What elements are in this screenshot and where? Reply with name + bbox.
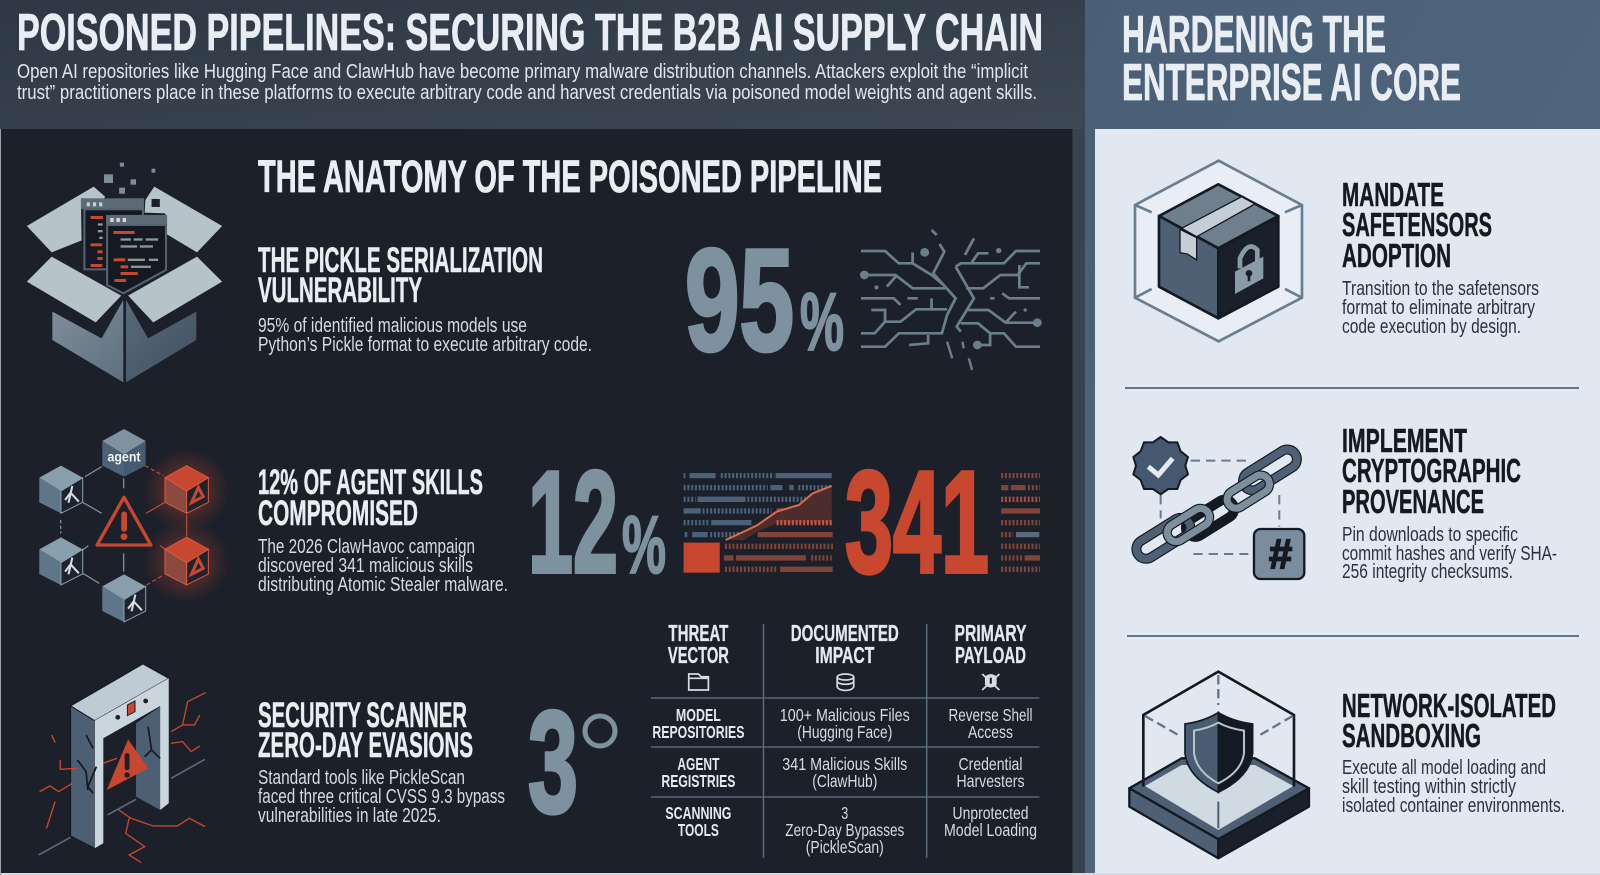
table row: agent registries: AGENT — [677, 754, 720, 774]
table row: agent registries: 341 Malicious Skills — [782, 754, 908, 774]
table: threat vectors — [651, 620, 1040, 858]
description: vulnerabilities in late 2025. — [258, 805, 441, 827]
table row: model repositories: REPOSITORIES — [652, 722, 744, 742]
description: skill testing within strictly — [1342, 776, 1516, 798]
header intro text — [17, 61, 1037, 104]
heading — [258, 241, 543, 310]
icon: shield in sandbox — [1129, 672, 1309, 858]
heading: SANDBOXING — [1342, 717, 1481, 754]
table header row: VECTOR — [668, 642, 729, 668]
table row: scanning tools: 3 — [841, 803, 848, 823]
chart: data bars with rising red line — [684, 476, 833, 573]
table row: scanning tools: Zero-Day Bypasses — [785, 820, 904, 840]
right header title: HARDENING THE — [1122, 6, 1386, 64]
description: Standard tools like PickleScan — [258, 767, 465, 789]
description: 95% of identified malicious models use — [258, 315, 527, 337]
stat: 95%: % — [800, 277, 844, 368]
heading: THE PICKLE SERIALIZATION — [258, 241, 543, 280]
stat: 12%: 12 — [528, 441, 618, 603]
table row: scanning tools: (PickleScan) — [806, 837, 884, 857]
block: agent skills compromised — [258, 463, 508, 596]
description: Transition to the safetensors — [1342, 278, 1539, 300]
description: discovered 341 malicious skills — [258, 555, 473, 577]
icon: breached security scanner — [39, 664, 206, 863]
description: distributing Atomic Stealer malware. — [258, 574, 508, 596]
cubes: normal nodes — [39, 466, 146, 622]
header intro text: Open AI repositories like Hugging Face and ClawHub have become primary malware distribution channels. Attackers exploit the “implicit — [17, 61, 1028, 83]
table row: scanning tools: SCANNING — [665, 803, 731, 823]
title: POISONED PIPELINES: SECURING THE B2B AI SUPPLY CHAIN — [17, 4, 1043, 62]
description: The 2026 ClawHavoc campaign — [258, 536, 475, 558]
heading: IMPLEMENT — [1342, 422, 1467, 459]
right header title — [1122, 6, 1461, 112]
icon: chain with badge and hash: # — [1268, 530, 1292, 577]
description — [1342, 524, 1557, 583]
table header icons — [689, 674, 999, 690]
heading — [1342, 176, 1492, 274]
cube: agent — [102, 429, 146, 477]
heading — [258, 696, 473, 765]
stat: 12%: % — [622, 500, 666, 591]
section heading: THE ANATOMY OF THE POISONED PIPELINE — [258, 151, 882, 202]
table row: model repositories: MODEL — [676, 705, 721, 725]
icon: locked box in hexagon — [1135, 161, 1302, 341]
panel: hardening recommendations — [1095, 129, 1600, 873]
table row: agent registries: Harvesters — [956, 771, 1025, 791]
heading — [1342, 687, 1556, 754]
table row: model repositories — [652, 705, 1032, 742]
description: format to eliminate arbitrary — [1342, 297, 1535, 319]
block: security scanner evasions — [258, 696, 505, 827]
chart: side bars — [1001, 476, 1040, 569]
description: 256 integrity checksums. — [1342, 561, 1513, 583]
heading — [258, 463, 483, 533]
cubes: compromised nodes — [165, 466, 208, 585]
description: faced three critical CVSS 9.3 bypass — [258, 786, 505, 808]
description — [258, 767, 505, 827]
table row: agent registries — [661, 754, 1025, 791]
description: code execution by design. — [1342, 316, 1521, 338]
description: Python’s Pickle format to execute arbitrary code. — [258, 334, 592, 356]
stat: 3 with degree ring: 3 — [528, 681, 578, 843]
icon: open box with code windows — [27, 163, 222, 382]
recommendation: cryptographic provenance — [1342, 422, 1557, 583]
recommendation: sandboxing — [1342, 687, 1565, 817]
cube: agent: agent — [107, 450, 141, 466]
table header row: PRIMARY — [954, 620, 1026, 646]
table row: scanning tools: Model Loading — [944, 820, 1037, 840]
heading: ZERO-DAY EVASIONS — [258, 726, 473, 765]
heading: PROVENANCE — [1342, 483, 1484, 520]
heading: 12% OF AGENT SKILLS — [258, 463, 483, 502]
heading: MANDATE — [1342, 176, 1444, 213]
table header row: PAYLOAD — [955, 642, 1026, 668]
table header row: DOCUMENTED — [791, 620, 899, 646]
table row: scanning tools — [665, 803, 1037, 857]
table row: model repositories: Access — [968, 722, 1013, 742]
heading: COMPROMISED — [258, 494, 418, 533]
recommendation: safetensors — [1342, 176, 1539, 338]
description — [1342, 757, 1565, 817]
icon: chain with badge and hash — [1133, 437, 1304, 579]
description — [1342, 278, 1539, 338]
panel: right header — [1085, 0, 1600, 875]
table header row: THREAT — [668, 620, 728, 646]
heading — [1342, 422, 1521, 520]
table header row: IMPACT — [815, 642, 874, 668]
table row: scanning tools: Unprotected — [952, 803, 1028, 823]
heading: ADOPTION — [1342, 237, 1451, 274]
table row: model repositories: (Hugging Face) — [797, 722, 892, 742]
header intro text: trust” practitioners place in these platforms to execute arbitrary code and harvest credentials via poisoned model weights and agent skills. — [17, 82, 1037, 104]
stat: 341: 341 — [845, 441, 989, 603]
block: pickle serialization vulnerability — [258, 241, 592, 356]
description — [258, 536, 508, 596]
table row: model repositories: 100+ Malicious Files — [780, 705, 910, 725]
table row: scanning tools: TOOLS — [678, 820, 719, 840]
description: Pin downloads to specific — [1342, 524, 1518, 546]
icon: warning triangle — [97, 497, 151, 545]
icon: agent skill network — [39, 429, 230, 622]
table header row — [668, 620, 1026, 668]
heading: SAFETENSORS — [1342, 206, 1492, 243]
table row: agent registries: Credential — [958, 754, 1022, 774]
panel: anatomy of the poisoned pipeline — [1, 129, 1072, 873]
description — [258, 315, 592, 356]
table row: agent registries: (ClawHub) — [812, 771, 877, 791]
table row: agent registries: REGISTRIES — [661, 771, 735, 791]
table row: model repositories: Reverse Shell — [948, 705, 1032, 725]
heading: VULNERABILITY — [258, 271, 422, 310]
icon: broken circuit — [860, 230, 1042, 370]
panel: left header — [0, 0, 1085, 129]
stat: 95%: 95 — [685, 219, 794, 381]
heading: SECURITY SCANNER — [258, 696, 467, 735]
